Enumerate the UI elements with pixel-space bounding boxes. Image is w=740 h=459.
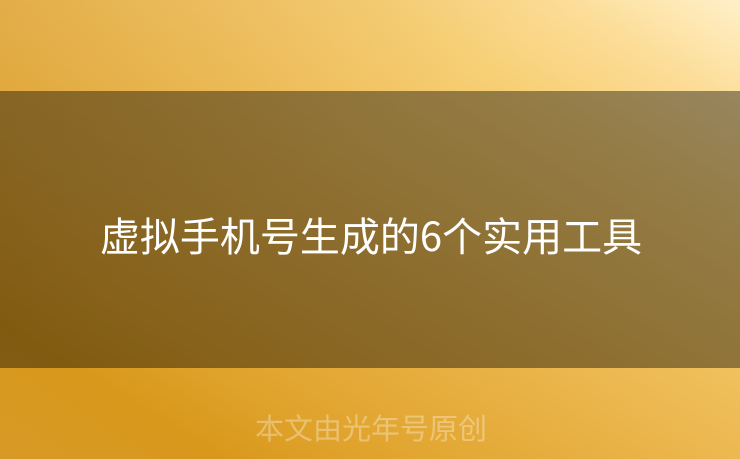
title: 虚拟手机号生成的6个实用工具: [100, 205, 642, 263]
watermark text: 本文由光年号原创: [255, 406, 487, 448]
dark translucent title band: [0, 91, 740, 368]
